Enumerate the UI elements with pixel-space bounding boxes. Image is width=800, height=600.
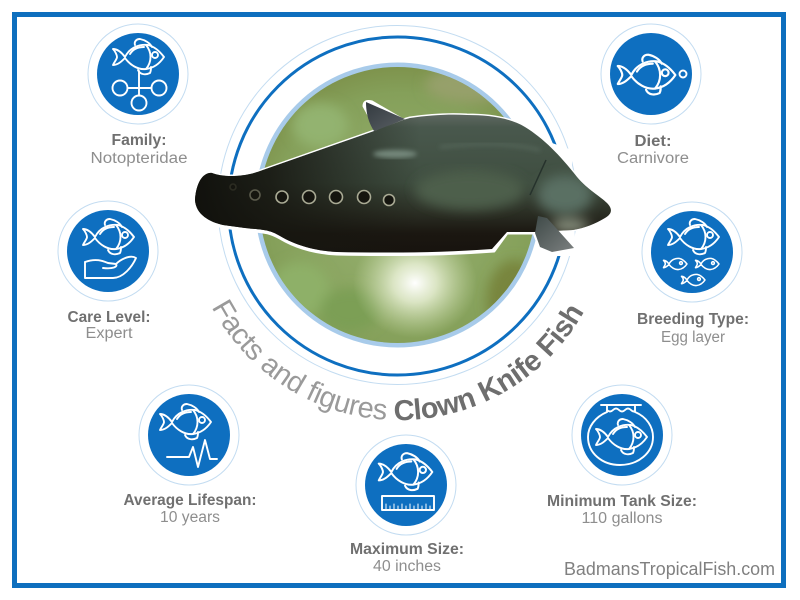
item: care level: [58, 201, 158, 342]
value: care level: Expert: [86, 325, 133, 342]
icon: fish with pulse: [139, 385, 239, 485]
value: diet: Carnivore: [617, 150, 689, 167]
dorsal fin: [366, 102, 405, 131]
light blue ring: [258, 65, 538, 345]
value: average lifespan: 10 years: [160, 509, 220, 526]
item: family: [88, 24, 188, 167]
aquarium background photo: [262, 67, 532, 343]
item: minimum tank size: [547, 385, 697, 527]
value: breeding type: Egg layer: [661, 329, 725, 346]
label: care level: Care Level:: [68, 309, 150, 326]
pectoral fin: [535, 216, 574, 252]
icon: fish with fry: [642, 202, 742, 302]
value: minimum tank size: 110 gallons: [582, 510, 663, 527]
source website: BadmansTropicalFish.com: [564, 559, 775, 579]
white gap in ring: [548, 143, 572, 256]
icon: fish with bubble: [601, 24, 701, 124]
value: family: Notopteridae: [90, 150, 188, 167]
clown knife fish body: [190, 110, 615, 255]
icon: fish with ruler: [356, 435, 456, 535]
item: maximum size: [350, 435, 464, 575]
central emblem with fish: [190, 26, 615, 384]
label: breeding type: Breeding Type:: [637, 311, 749, 328]
label: minimum tank size: Minimum Tank Size:: [547, 493, 697, 510]
icon: fish over hand: [58, 201, 158, 301]
fish white outline: [195, 102, 611, 255]
label: family: Family:: [112, 132, 166, 149]
icon: fish with family tree: [88, 24, 188, 124]
blue ring: [228, 37, 566, 375]
label: average lifespan: Average Lifespan:: [124, 492, 256, 509]
label: diet: Diet:: [634, 133, 672, 150]
value: maximum size: 40 inches: [373, 558, 441, 575]
label: maximum size: Maximum Size:: [350, 541, 464, 558]
curved title: Facts and figures Clown Knife Fish: [212, 299, 584, 420]
ocelli spots: [230, 184, 394, 206]
outer thin ring: [218, 26, 577, 384]
item: breeding type: [637, 202, 749, 346]
item: average lifespan: [124, 385, 256, 526]
icon: fish in bowl: [572, 385, 672, 485]
item: diet: [601, 24, 701, 167]
